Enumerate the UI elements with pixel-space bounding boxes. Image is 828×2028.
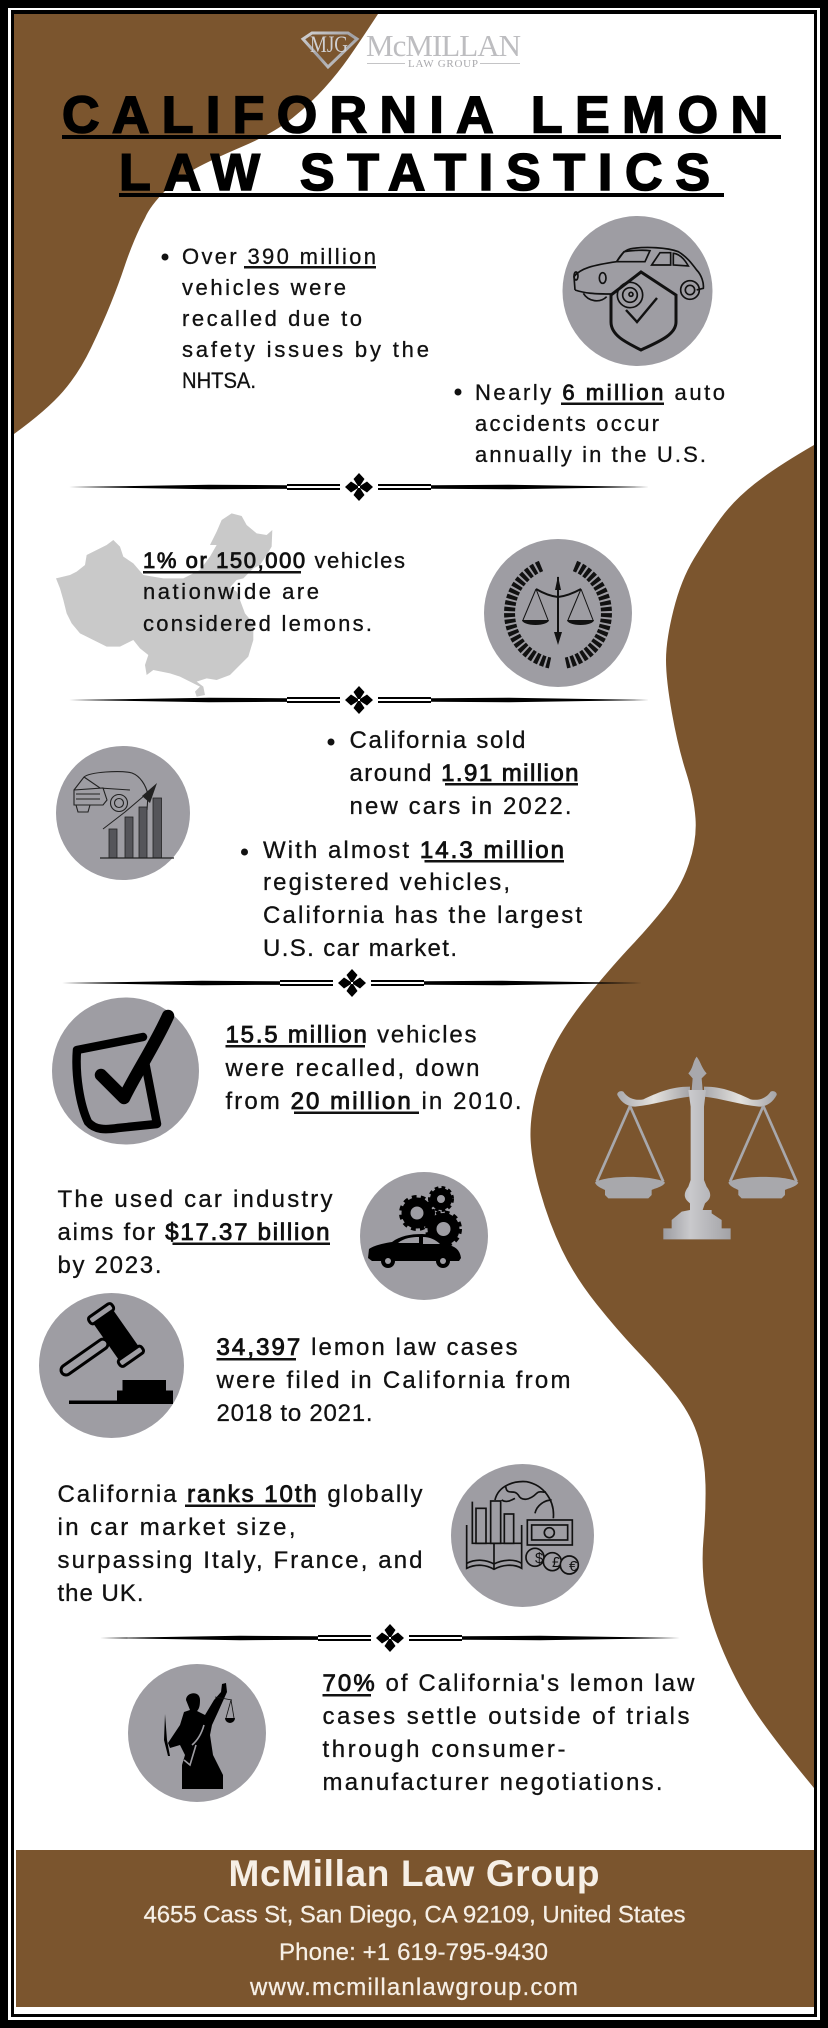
stat: used car industry: [58, 1186, 332, 1279]
divider 3: [62, 969, 642, 997]
stat: new cars sold: [328, 727, 578, 820]
stat: auto accidents: Nearly 6 million auto: [475, 380, 725, 405]
stat: recalls 2010: were recalled, down: [224, 1055, 480, 1082]
logo: McMILLAN: [366, 28, 521, 63]
stat: lemon law cases: were filed in California from: [216, 1367, 570, 1394]
stat: registered vehicles: With almost 14.3 million: [263, 837, 564, 864]
icon: checkbox: [52, 998, 199, 1144]
logo: [303, 28, 521, 70]
divider 2: [69, 686, 649, 714]
stat: recalled vehicles: safety issues by the: [182, 337, 429, 362]
footer band: McMillan Law Group: [228, 1853, 600, 1894]
icon: scales in wreath: [484, 539, 632, 687]
stat: registered vehicles: registered vehicles,: [263, 869, 510, 896]
stat: lemons nationwide: [143, 548, 405, 636]
footer band: [16, 1850, 814, 2007]
stat: registered vehicles: [241, 837, 582, 962]
icon: globe, book and currency: £: [552, 1554, 561, 1571]
scales of justice illustration: [595, 1057, 798, 1239]
logo: LAW GROUP: [408, 58, 478, 70]
stat: auto accidents: annually in the U.S.: [475, 442, 706, 467]
footer band: Phone: +1 619-795-9430: [279, 1939, 548, 1966]
icon: globe, book and currency: €: [569, 1558, 578, 1575]
stat: used car industry: aims for $17.37 billion: [58, 1219, 330, 1246]
title: LAW STATISTICS: [119, 144, 710, 202]
icon: lady justice: [128, 1664, 266, 1802]
icon: gavel: [39, 1293, 184, 1438]
divider 4: [100, 1624, 680, 1652]
stat: registered vehicles: California has the largest: [263, 902, 582, 929]
stat: lemons nationwide: nationwide are: [143, 579, 319, 604]
stat: new cars sold: new cars in 2022.: [350, 793, 572, 820]
title: [62, 86, 781, 202]
stat: auto accidents: [454, 380, 725, 467]
stat: recalled vehicles: NHTSA.: [182, 368, 256, 393]
stat: settlements: [322, 1670, 695, 1796]
stat: registered vehicles: U.S. car market.: [263, 935, 457, 962]
footer band: 4655 Cass St, San Diego, CA 92109, United States: [144, 1902, 686, 1928]
stat: recalled vehicles: recalled due to: [182, 306, 362, 331]
icon: globe, book and currency: [451, 1464, 594, 1607]
divider 1: [69, 473, 649, 501]
stat: lemon law cases: 2018 to 2021.: [216, 1400, 372, 1427]
stat: lemon law cases: [216, 1334, 570, 1427]
brown blob: top left: [14, 14, 378, 434]
stat: global ranking: [58, 1481, 422, 1607]
stat: used car industry: by 2023.: [58, 1252, 162, 1279]
stat: global ranking: in car market size,: [58, 1514, 296, 1541]
stat: global ranking: California ranks 10th globally: [58, 1481, 422, 1508]
stat: lemons nationwide: 1% or 150,000 vehicles: [143, 548, 405, 573]
stat: lemons nationwide: considered lemons.: [143, 611, 372, 636]
brown blob: right side: [530, 445, 814, 1788]
title: CALIFORNIA LEMON: [62, 86, 768, 144]
icon: gears and car: [360, 1172, 488, 1300]
stat: recalled vehicles: [162, 244, 429, 393]
stat: lemon law cases: 34,397 lemon law cases: [216, 1334, 518, 1361]
stat: global ranking: surpassing Italy, France, and: [58, 1547, 422, 1574]
stat: recalls 2010: from 20 million in 2010.: [226, 1088, 522, 1115]
stat: auto accidents: accidents occur: [475, 411, 659, 436]
stat: settlements: manufacturer negotiations.: [322, 1769, 662, 1796]
stat: settlements: through consumer-: [322, 1736, 566, 1763]
stat: global ranking: the UK.: [58, 1580, 144, 1607]
stat: recalls 2010: 15.5 million vehicles: [226, 1022, 476, 1048]
stat: recalled vehicles: Over 390 million: [182, 244, 376, 269]
map of China: [56, 513, 272, 697]
stat: recalled vehicles: vehicles were: [182, 275, 346, 300]
stat: settlements: 70% of California's lemon law: [322, 1670, 695, 1697]
icon: globe, book and currency: $: [535, 1550, 544, 1567]
stat: used car industry: The used car industry: [58, 1186, 332, 1213]
stat: new cars sold: California sold: [350, 727, 526, 754]
stat: recalls 2010: [224, 1022, 522, 1115]
icon: car with shield: [562, 216, 712, 366]
icon: truck with rising bars: [56, 746, 190, 880]
logo: MJG: [310, 32, 348, 57]
stat: new cars sold: around 1.91 million: [350, 760, 578, 787]
stat: settlements: cases settle outside of trials: [322, 1703, 690, 1730]
footer band: www.mcmillanlawgroup.com: [249, 1974, 578, 2001]
